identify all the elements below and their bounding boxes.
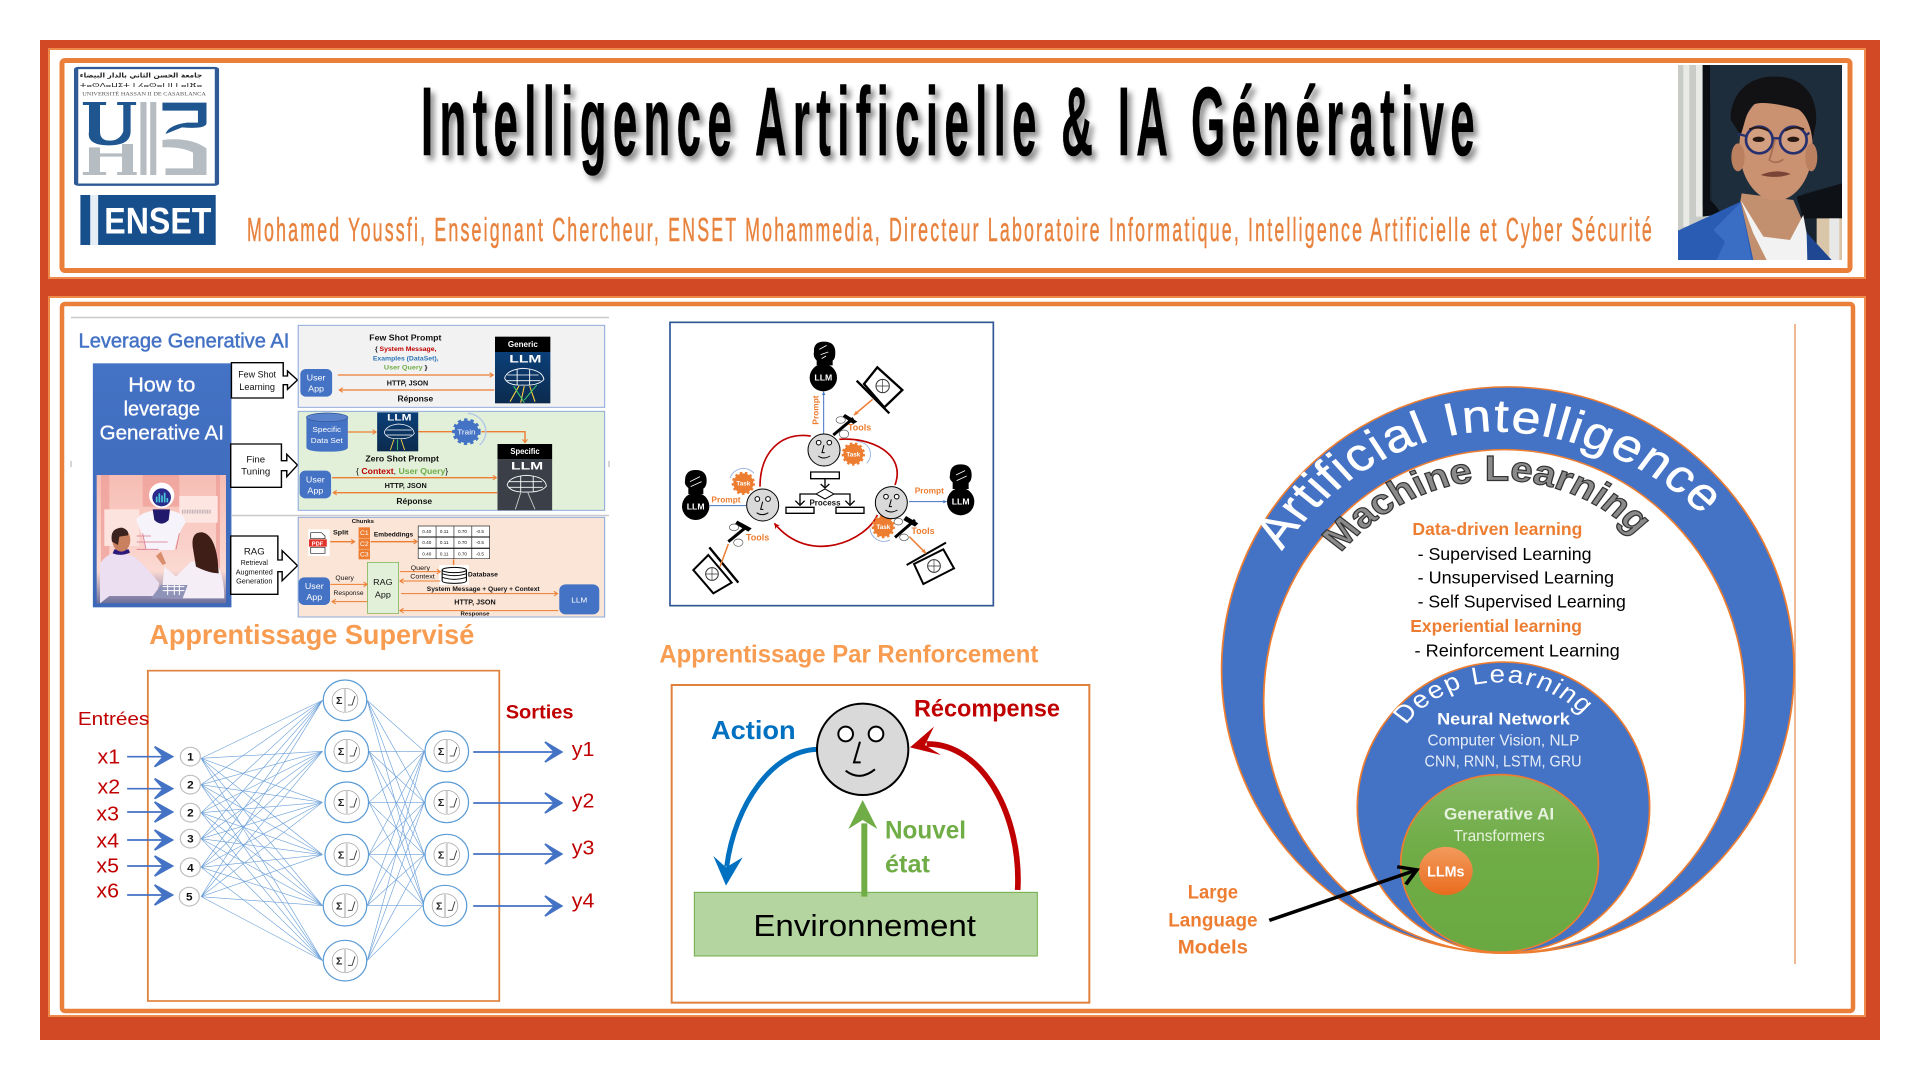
prompt arrows: Prompt	[915, 485, 944, 495]
callout: RAG: Retrieval	[241, 558, 268, 567]
environment box: Environnement	[753, 909, 977, 943]
network frame	[148, 671, 499, 1001]
output labels	[506, 702, 594, 912]
circle: Deep Learning: Deep Learning	[1392, 668, 1592, 724]
panel: zero shot prompt / fine tuning: HTTP, JSON	[385, 481, 427, 490]
panel: few shot prompt: Generic	[508, 339, 538, 349]
panel: RAG pipeline: 0.40	[422, 540, 432, 545]
panel: RAG pipeline: 0.70	[458, 540, 468, 545]
blue card: How to leverage Generative AI: leverage	[124, 397, 200, 420]
LLM agents: LLM	[814, 373, 832, 383]
reward arrow	[910, 696, 1060, 890]
input nodes: 2	[187, 780, 194, 792]
panel: RAG pipeline: System Message + Query + Context	[427, 586, 540, 593]
heading: Apprentissage Supervisé: Apprentissage Supervisé	[149, 620, 474, 651]
panel: zero shot prompt / fine tuning: { Context, User Query}	[356, 466, 448, 476]
callout: RAG: Augmented	[236, 568, 273, 576]
callout: Fine Tuning: Fine	[246, 455, 265, 465]
input labels: x6	[96, 880, 119, 902]
vertical orange rule	[1794, 324, 1796, 964]
output labels: y4	[572, 890, 594, 912]
prompt arrows	[709, 392, 947, 506]
tools hammers: Tools	[746, 533, 769, 543]
LLM agents	[682, 342, 974, 520]
panel: RAG pipeline: Context	[410, 574, 435, 581]
hidden and output neurons: Σ	[438, 851, 444, 861]
thin decorative rule and ticks	[71, 318, 609, 516]
panel: RAG pipeline	[298, 517, 605, 618]
panel: RAG pipeline: 0.11	[440, 529, 449, 534]
hidden and output neurons	[323, 680, 469, 981]
panel: zero shot prompt / fine tuning: LLM	[511, 460, 543, 472]
logo: Université Hassan II: UNIVERSITÉ HASSAN II DE CASABLANCA	[82, 90, 206, 97]
input nodes: 5	[186, 892, 193, 904]
process flowchart: Process	[809, 499, 841, 508]
frame	[672, 685, 1089, 1003]
input nodes: 1	[187, 752, 194, 764]
circle: Deep Learning	[1356, 661, 1650, 952]
blue card: How to leverage Generative AI	[93, 363, 231, 607]
circle: Machine Learning: Machine Learning	[1320, 455, 1650, 552]
panel: few shot prompt: { System Message,	[375, 346, 436, 353]
circle: Machine Learning	[1262, 448, 1746, 954]
circle: LLMs	[1419, 847, 1473, 895]
input labels: x4	[96, 830, 119, 852]
output labels: Sorties	[506, 702, 574, 723]
panel: RAG pipeline: LLM	[571, 596, 587, 604]
callout: Fine Tuning: Tuning	[241, 467, 270, 477]
output labels: y1	[572, 739, 594, 761]
panel: RAG pipeline: Response	[334, 590, 364, 597]
callout: RAG: RAG	[244, 547, 265, 556]
input labels: x5	[96, 855, 119, 877]
panel: RAG pipeline: 0.70	[458, 551, 468, 556]
agent faces	[747, 434, 907, 521]
circle: Deep Learning: CNN, RNN, LSTM, GRU	[1425, 753, 1582, 770]
panel: few shot prompt: User Query }	[384, 365, 428, 372]
task gears: Task	[876, 524, 891, 531]
output arrows	[473, 742, 562, 916]
illustration: robot with two researchers	[97, 475, 226, 603]
callout: Few Shot Learning: Few Shot	[238, 370, 276, 380]
LLM agents: LLM	[952, 497, 970, 507]
panel: RAG pipeline: App	[306, 592, 322, 602]
blue card: How to leverage Generative AI: Generative AI	[100, 421, 224, 444]
task gears: Task	[736, 481, 751, 488]
input labels: x2	[97, 776, 120, 798]
panel: RAG pipeline: Query	[335, 575, 355, 582]
red cycle arrows	[760, 435, 897, 546]
panel: few shot prompt	[298, 325, 605, 407]
panel: zero shot prompt / fine tuning: App	[307, 486, 323, 495]
logo: Université Hassan II: جامعة الحسن الثاني بالدار البيضاء	[80, 72, 202, 80]
panel: few shot prompt: Few Shot Prompt	[369, 333, 441, 343]
heading: Apprentissage Par Renforcement	[659, 641, 1038, 668]
panel: RAG pipeline: Database	[468, 572, 498, 579]
hidden and output neurons: Σ	[336, 696, 342, 707]
input nodes	[179, 747, 200, 906]
hidden and output neurons: Σ	[336, 902, 342, 912]
input labels: x3	[96, 803, 119, 825]
task gears: Task	[846, 451, 861, 458]
input arrows	[127, 747, 172, 905]
circle: Generative AI	[1401, 775, 1598, 952]
circle: Artificial Intelligence	[1220, 386, 1795, 954]
logo: Université Hassan II	[76, 68, 217, 185]
panel: RAG pipeline: -0.5	[476, 540, 485, 545]
circle: Generative AI: Generative AI	[1444, 804, 1554, 823]
circle: Deep Learning: Computer Vision, NLP	[1428, 732, 1579, 749]
panel: RAG pipeline: App	[375, 590, 391, 599]
panel: RAG pipeline: Response	[461, 612, 490, 618]
new state arrow	[848, 800, 966, 897]
action arrow	[711, 715, 817, 886]
panel: zero shot prompt / fine tuning: Specific	[510, 446, 540, 456]
label: Large Language Models	[1168, 882, 1258, 958]
infographic canvas: ENSET	[104, 200, 212, 241]
input labels	[78, 710, 149, 902]
text: learning types: - Unsupervised Learning	[1418, 568, 1614, 587]
panel: Apprentissage Supervisé	[78, 620, 594, 1001]
agent face	[817, 704, 908, 795]
panel: RAG pipeline: -0.5	[476, 529, 485, 534]
panel: few shot prompt: User	[307, 373, 326, 383]
text: learning types: - Supervised Learning	[1418, 544, 1592, 564]
panel: RAG pipeline: 0.40	[422, 551, 432, 556]
output labels: y3	[572, 837, 594, 859]
input labels: Entrées	[78, 710, 149, 730]
panel: nested AI circles	[1168, 386, 1795, 958]
text: learning types	[1410, 519, 1626, 660]
circle: Deep Learning: Neural Network	[1437, 709, 1571, 728]
panel: zero shot prompt / fine tuning: Train	[457, 428, 476, 436]
text: learning types: Experiential learning	[1410, 616, 1582, 636]
heading: Leverage Generative AI: Leverage Generative AI	[79, 329, 289, 352]
label: Large Language Models: Models	[1178, 936, 1248, 958]
panel: few shot prompt: App	[308, 384, 324, 394]
panel: Apprentissage Par Renforcement	[659, 641, 1089, 1003]
panel: RAG pipeline: PDF	[312, 541, 324, 547]
panel: RAG pipeline: RAG	[373, 577, 393, 587]
hidden and output neurons: Σ	[336, 957, 342, 967]
prompt arrows: Prompt	[711, 494, 741, 504]
callout: RAG	[231, 536, 297, 594]
network connections	[201, 700, 424, 961]
task gears	[730, 442, 893, 541]
panel: RAG pipeline: C1	[360, 530, 369, 537]
callout: Few Shot Learning	[231, 363, 297, 398]
panel: zero shot prompt / fine tuning	[298, 411, 605, 510]
input nodes: 4	[187, 863, 194, 874]
panel: zero shot prompt / fine tuning: Specific	[312, 425, 341, 434]
new state arrow: Nouvel	[885, 817, 966, 844]
text: learning types: - Self Supervised Learning	[1418, 591, 1626, 611]
panel: few shot prompt: HTTP, JSON	[387, 379, 428, 387]
hidden and output neurons: Σ	[338, 798, 344, 809]
input nodes: 3	[187, 834, 194, 846]
panel: RAG pipeline: 0.11	[440, 551, 449, 556]
blue card: How to leverage Generative AI: How to	[128, 373, 195, 396]
panel: zero shot prompt / fine tuning: Data Set	[311, 436, 344, 445]
panel: few shot prompt: LLM	[509, 353, 541, 365]
logo: ENSET	[80, 195, 216, 245]
callout: Fine Tuning	[231, 444, 297, 487]
callout: RAG: Generation	[236, 577, 272, 586]
panel: RAG pipeline: -0.5	[476, 551, 485, 556]
input labels: x1	[97, 746, 120, 768]
hidden and output neurons: Σ	[338, 851, 344, 861]
arrow: LLMs pointer	[1269, 867, 1417, 920]
environment box	[694, 892, 1037, 956]
panel: RAG pipeline: HTTP, JSON	[454, 598, 496, 607]
circle: Artificial Intelligence: Artificial Intelligence	[1261, 402, 1716, 552]
panel: RAG pipeline: Chunks	[352, 519, 375, 525]
tools hammers	[720, 399, 935, 567]
output labels: y2	[572, 790, 594, 812]
reward arrow: Récompense	[914, 696, 1060, 723]
label: Large Language Models: Large	[1188, 882, 1238, 903]
hidden and output neurons: Σ	[438, 798, 444, 809]
panel: few shot prompt: Réponse	[397, 394, 433, 403]
label: Large Language Models: Language	[1168, 910, 1258, 931]
tools hammers: Tools	[911, 526, 935, 536]
text: learning types: - Reinforcement Learning	[1415, 640, 1620, 660]
panel: RAG pipeline: C2	[360, 541, 369, 548]
panel: RAG pipeline: 0.40	[422, 529, 432, 534]
circle: LLMs: LLMs	[1427, 864, 1464, 880]
laptops	[693, 367, 954, 593]
hidden and output neurons: Σ	[438, 747, 444, 758]
panel: RAG pipeline: 0.11	[440, 540, 449, 545]
callout: Few Shot Learning: Learning	[239, 382, 275, 392]
panel: RAG pipeline: 0.70	[458, 529, 468, 534]
portrait photo	[1678, 65, 1842, 260]
panel: zero shot prompt / fine tuning: Réponse	[396, 496, 432, 506]
panel: zero shot prompt / fine tuning: LLM	[387, 413, 411, 423]
panel: RAG pipeline: Split	[333, 530, 349, 537]
panel: RAG pipeline: Embeddings	[374, 532, 413, 539]
text: learning types: Data-driven learning	[1412, 519, 1582, 539]
process flowchart	[786, 472, 864, 513]
tools hammers: Tools	[848, 423, 871, 433]
panel: RAG pipeline: C3	[360, 552, 369, 559]
new state arrow: état	[885, 851, 930, 878]
panel: multi-agent system	[670, 322, 993, 606]
hidden and output neurons: Σ	[338, 747, 344, 758]
panel: zero shot prompt / fine tuning: Zero Shot Prompt	[365, 454, 439, 464]
prompt arrows: Prompt	[811, 395, 821, 425]
panel: RAG pipeline: User	[305, 581, 324, 591]
circle: Generative AI: Transformers	[1454, 828, 1545, 845]
input nodes: 2	[187, 808, 194, 820]
panel: Leverage Generative AI	[79, 325, 605, 618]
panel: RAG pipeline: Query	[411, 565, 431, 572]
logo: Université Hassan II: ⵜⴰⵙⴷⴰⵡⵉⵜ ⵏ ⵃⴰⵙⴰⵏ II ⵏ ⴰⵏⴼⴰ	[80, 82, 202, 88]
hidden and output neurons: Σ	[436, 902, 442, 912]
action arrow: Action	[711, 715, 796, 745]
panel: zero shot prompt / fine tuning: User	[306, 475, 325, 484]
panel: few shot prompt: Examples (DataSet),	[373, 356, 439, 362]
LLM agents: LLM	[687, 501, 705, 511]
